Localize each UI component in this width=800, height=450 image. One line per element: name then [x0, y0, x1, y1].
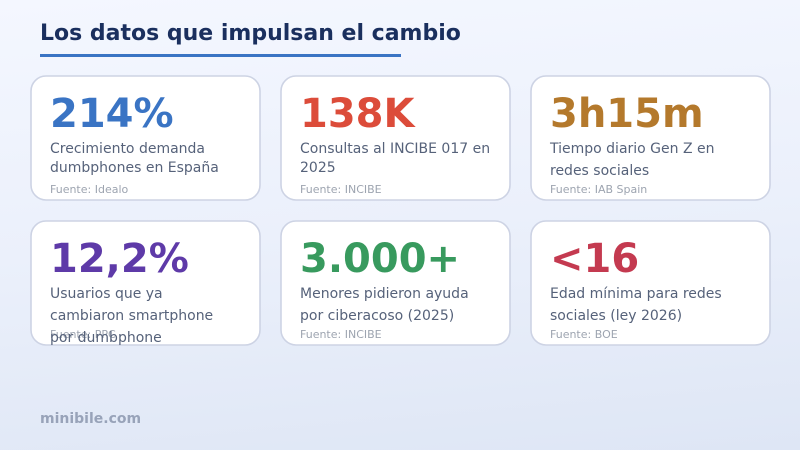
stat value: 214%	[50, 91, 174, 137]
description: Crecimiento demanda	[50, 141, 205, 157]
title: Los datos que impulsan el cambio	[40, 21, 461, 46]
description	[50, 286, 213, 346]
source: Fuente: INCIBE	[300, 328, 382, 341]
description: sociales (ley 2026)	[550, 308, 682, 324]
description: redes sociales	[550, 163, 649, 179]
description: Usuarios que ya	[50, 286, 163, 302]
stat value: <16	[550, 236, 639, 282]
panel: <16	[530, 220, 771, 346]
panel: 3h15m	[530, 75, 771, 201]
source: Fuente: IAB Spain	[550, 183, 647, 196]
source: Fuente: PPC	[50, 328, 116, 341]
footer brand: minibile.com	[40, 411, 141, 427]
stat value: 3h15m	[550, 91, 704, 137]
description	[300, 286, 469, 324]
description: Edad mínima para redes	[550, 286, 722, 302]
description: Menores pidieron ayuda	[300, 286, 469, 302]
description: por dumbphone	[50, 330, 162, 346]
stat value: 3.000+	[300, 236, 460, 282]
description	[50, 141, 219, 176]
source: Fuente: Idealo	[50, 183, 128, 196]
description: 2025	[300, 160, 336, 176]
description: Tiempo diario Gen Z en	[550, 141, 714, 157]
stat value: 12,2%	[50, 236, 189, 282]
title underline	[40, 54, 401, 57]
description: dumbphones en España	[50, 160, 219, 176]
source: Fuente: BOE	[550, 328, 618, 341]
description	[300, 141, 490, 176]
panel: 138K	[280, 75, 511, 201]
description	[550, 286, 722, 324]
description	[550, 141, 714, 179]
description: por ciberacoso (2025)	[300, 308, 454, 324]
description: Consultas al INCIBE 017 en	[300, 141, 490, 157]
panel: 12,2%	[30, 220, 261, 346]
description: cambiaron smartphone	[50, 308, 213, 324]
stat value: 138K	[300, 91, 414, 137]
panel: 214%	[30, 75, 261, 201]
source: Fuente: INCIBE	[300, 183, 382, 196]
panel: 3.000+	[280, 220, 511, 346]
